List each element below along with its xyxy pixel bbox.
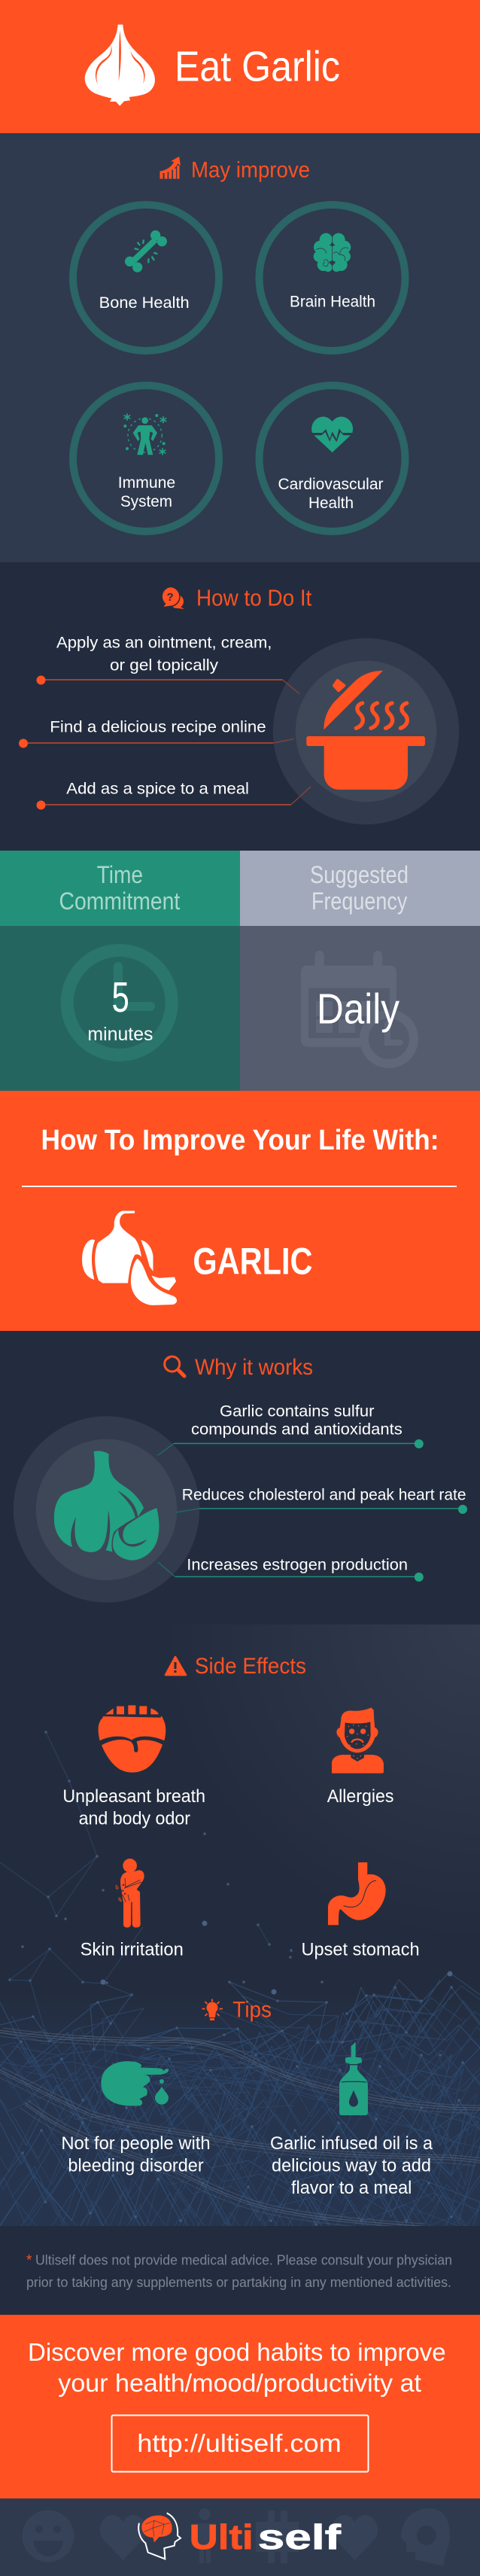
icon: head with brain [138, 2513, 181, 2559]
label: Unpleasant breath [62, 1786, 205, 1807]
panel: how to do it [0, 562, 480, 851]
item: upset stomach [301, 1862, 420, 1959]
item: allergies [327, 1707, 393, 1807]
heading: suggested frequency: Frequency [311, 888, 407, 915]
label: Allergies [327, 1786, 393, 1807]
heading: why it works: Why it works [195, 1355, 313, 1380]
panel: how to improve [0, 1091, 480, 1331]
label: Health [308, 494, 354, 512]
icon: calendar with clock [301, 955, 414, 1064]
label: Garlic infused oil is a [270, 2133, 433, 2154]
panel: disclaimer [0, 2226, 480, 2315]
label: Bone Health [99, 294, 190, 312]
callout: find a recipe [19, 717, 294, 748]
call to action text: your health/mood/productivity at [58, 2369, 421, 2397]
callout: apply topically [36, 634, 299, 694]
label: Brain Health [290, 293, 375, 311]
heading: time commitment: Time [97, 861, 143, 888]
callout: sulfur compounds: compounds and antioxidants [191, 1420, 403, 1438]
callout: estrogen: Increases estrogen production [187, 1555, 408, 1573]
button: website link: http://ultiself.com [137, 2429, 342, 2457]
value: 5 minutes [87, 973, 153, 1045]
callout: apply topically: or gel topically [110, 656, 218, 674]
label: Upset stomach [301, 1939, 420, 1959]
panel: side effects and tips [0, 1624, 480, 2265]
value: daily: Daily [317, 985, 399, 1033]
callout: apply topically: Apply as an ointment, cream, [56, 634, 272, 652]
heading: how to improve your life with: How To Improve Your Life With: [41, 1125, 439, 1156]
panel: why it works [0, 1331, 480, 1624]
icon: mouth and tongue [99, 1705, 166, 1773]
label: Immune [118, 473, 175, 492]
callout: cholesterol: Reduces cholesterol and peak heart rate [182, 1485, 466, 1503]
heading: garlic: GARLIC [193, 1240, 313, 1282]
icon: magnifier [165, 1357, 184, 1376]
title: Eat Garlic [175, 42, 340, 90]
icon: oil dropper bottle [339, 2042, 368, 2115]
heading: may improve: May improve [191, 158, 310, 182]
panel: header [0, 0, 480, 133]
label: Not for people with [61, 2133, 211, 2154]
callout: sulfur compounds [158, 1402, 424, 1456]
label: flavor to a meal [291, 2178, 412, 2198]
icon: warning triangle [166, 1657, 186, 1675]
label [278, 475, 384, 512]
icon: growth chart [159, 157, 181, 179]
card: immune system [73, 385, 219, 531]
panel: time commitment [0, 851, 240, 1091]
icon: bone [125, 230, 167, 273]
item: skin irritation [81, 1859, 184, 1959]
wordmark: Ulti [190, 2517, 254, 2556]
disclaimer text: * [26, 2252, 32, 2268]
label [118, 473, 175, 510]
label [61, 2133, 211, 2176]
icon: cooking pot [273, 638, 459, 824]
heading: side effects: Side Effects [195, 1654, 306, 1679]
panel: suggested frequency [240, 851, 480, 1091]
card: bone health [73, 205, 219, 351]
card: brain health [259, 205, 405, 351]
wordmark [190, 2517, 342, 2556]
icon: garlic bulb [85, 25, 155, 106]
icon: heart with pulse [311, 416, 353, 452]
call to action text: Discover more good habits to improve [28, 2338, 446, 2366]
icon: stomach [328, 1862, 386, 1925]
heading: suggested frequency: Suggested [310, 861, 409, 888]
icon: immune person [123, 413, 166, 455]
heading: suggested frequency [310, 861, 409, 915]
panel: may improve [0, 133, 480, 562]
value: 5 minutes: 5 [111, 973, 129, 1022]
watermark icons [23, 2508, 450, 2566]
item: unpleasant breath [62, 1705, 205, 1829]
panel: call to action [0, 2315, 480, 2498]
heading: time commitment: Commitment [59, 888, 180, 915]
icon: person scratching [116, 1859, 144, 1928]
tip: bleeding disorder [61, 2061, 211, 2176]
card: cardiovascular health [259, 385, 405, 531]
callout: cholesterol [176, 1485, 467, 1514]
call to action text [28, 2338, 446, 2397]
icon: garlic bulb and clove [14, 1416, 199, 1603]
icon: light bulb [202, 1999, 223, 2020]
label [270, 2133, 433, 2198]
button: website link [111, 2415, 369, 2472]
label: System [120, 492, 172, 510]
label [62, 1786, 205, 1829]
icon: chat question [162, 587, 184, 609]
logo: ultiself [138, 2513, 342, 2559]
callout: sulfur compounds: Garlic contains sulfur [220, 1402, 374, 1420]
label: Skin irritation [81, 1939, 184, 1959]
icon: garlic with clove [82, 1210, 177, 1305]
wordmark: self [258, 2517, 342, 2556]
panel: footer [0, 2498, 480, 2576]
callout: find a recipe: Find a delicious recipe online [50, 717, 266, 735]
value: 5 minutes: minutes [87, 1024, 153, 1045]
heading: tips: Tips [232, 1997, 272, 2022]
disclaimer text: prior to taking any supplements or partaking in any mentioned activities. [26, 2274, 451, 2290]
icon: clock [67, 950, 172, 1055]
label: Cardiovascular [278, 475, 384, 493]
callout: add as a spice: Add as a spice to a meal [66, 780, 249, 798]
label: bleeding disorder [68, 2156, 204, 2176]
label: and body odor [79, 1809, 190, 1829]
tip: garlic infused oil [270, 2042, 433, 2198]
disclaimer text [26, 2252, 452, 2290]
label: delicious way to add [272, 2156, 431, 2176]
icon: bleeding finger [101, 2061, 169, 2106]
callout: estrogen [158, 1555, 424, 1582]
icon: man with rash [332, 1707, 384, 1774]
callout: add as a spice [36, 780, 311, 810]
network background [0, 1732, 480, 2265]
disclaimer text: Ultiself does not provide medical advice. Please consult your physician [35, 2252, 452, 2267]
icon: brain [314, 233, 351, 272]
heading: how to do it: How to Do It [196, 586, 312, 611]
heading: time commitment [59, 861, 180, 915]
icon: chat question: ? [167, 591, 174, 604]
